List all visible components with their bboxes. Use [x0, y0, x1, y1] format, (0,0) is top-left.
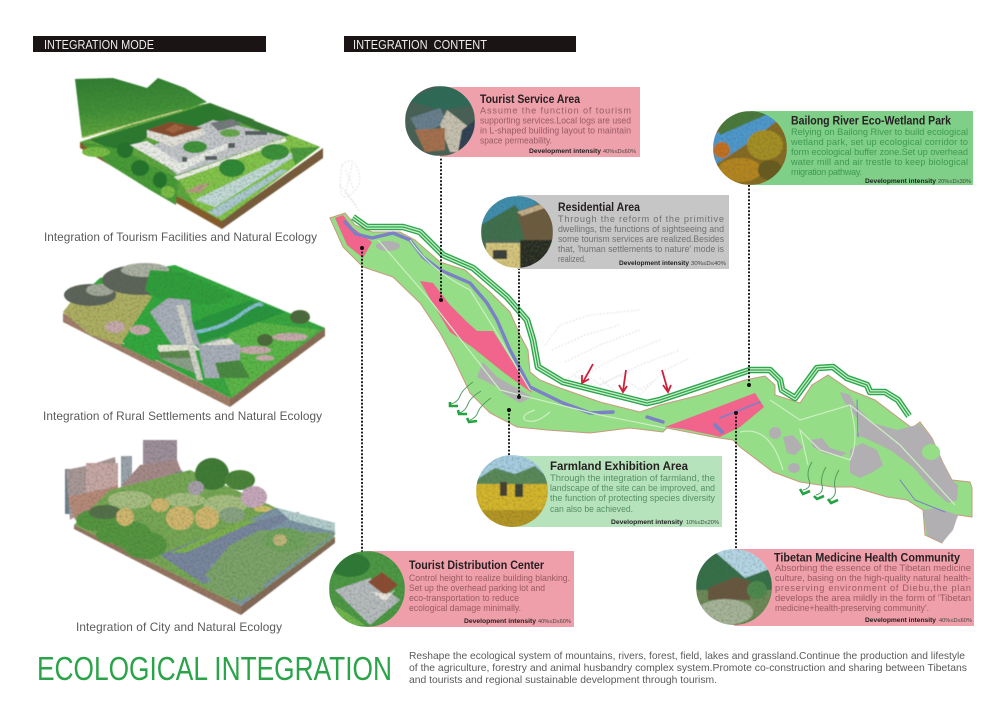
body: farmland: [550, 473, 715, 514]
development intensity: Development intensity: [865, 178, 937, 185]
site map: [330, 161, 972, 543]
body: tibetan medicine community: culture, basing on the high-quality natural health-: [775, 573, 971, 583]
panel: tibetan medicine health community: [696, 549, 974, 627]
body: distribution center: eco-transportation to reduce: [409, 593, 519, 603]
body: tourist service area: Assume the function of tourism: [480, 106, 631, 116]
body: eco-wetland park: migration pathway.: [791, 167, 862, 177]
main title: ECOLOGICAL INTEGRATION: [37, 650, 392, 687]
illustration: city block: [65, 440, 335, 615]
body: residential area: [558, 214, 724, 264]
body: farmland: the function of protecting species diversity: [550, 493, 715, 503]
body: farmland: can also be achieved.: [550, 504, 633, 514]
map: green park area: [330, 213, 972, 543]
body: tourist service area: supporting services.Local logs are used: [480, 116, 631, 126]
panel: bailong river eco-wetland park: [713, 111, 973, 185]
caption: rural settlements: Integration of Rural Settlements and Natural Ecology: [43, 409, 322, 423]
development intensity: Development intensity: [865, 617, 937, 624]
summary text: and tourists and regional sustainable development through tourism.: [409, 675, 717, 686]
body: distribution center: ecological damage minimally.: [409, 603, 521, 613]
body: tibetan medicine community: [775, 563, 971, 613]
heading: integration content: [344, 36, 576, 52]
panel: tourist distribution center: [329, 551, 574, 627]
photo: eco-wetland park: [713, 111, 787, 185]
body: distribution center: Set up the overhead parking lot and: [409, 583, 545, 593]
development intensity: 40%≤D≤60%: [603, 149, 636, 155]
body: farmland: landscape of the site can be improved, and: [550, 483, 715, 493]
development intensity: 30%≤D≤40%: [691, 261, 726, 267]
body: distribution center: [409, 573, 570, 613]
heading: tibetan medicine community: Tibetan Medicine Health Community: [774, 552, 961, 564]
faint context sketch: [340, 161, 690, 396]
icons: red inflow arrows: [582, 364, 671, 392]
photo: farmland: [476, 455, 548, 528]
development intensity: [619, 260, 726, 267]
development intensity: 20%≤D≤30%: [938, 179, 971, 185]
map: green ecological corridor: [353, 217, 909, 416]
body: residential area: dwellings, the functions of sightseeing and: [558, 224, 724, 234]
development intensity: [865, 178, 971, 185]
illustration: tourism facilities block: [75, 78, 323, 229]
body: tibetan medicine community: develops the area mildly in the form of 'Tibetan: [775, 593, 971, 603]
body: eco-wetland park: form ecological buffer zone.Set up overhead: [791, 147, 968, 157]
body: residential area: some tourism services are realized.Besides: [558, 234, 724, 244]
body: tibetan medicine community: medicine+health-preserving community'.: [775, 603, 929, 613]
development intensity: Development intensity: [529, 148, 602, 155]
development intensity: Development intensity: [619, 260, 690, 267]
development intensity: [529, 148, 636, 155]
body: eco-wetland park: [790, 127, 968, 177]
map: pink commercial zones: [335, 215, 764, 437]
heading: residential area: Residential Area: [558, 201, 640, 214]
body: tourist service area: [480, 106, 631, 146]
heading: farmland: Farmland Exhibition Area: [550, 460, 689, 473]
heading: integration content: INTEGRATION CONTENT: [353, 37, 487, 52]
body: tourist service area: in L-shaped building layout to maintain: [480, 126, 631, 136]
body: eco-wetland park: wetland park, set up ecological corridor to: [790, 137, 968, 147]
photo: residential area: [481, 196, 553, 268]
development intensity: Development intensity: [464, 618, 537, 625]
body: tourist service area: space permeability.: [480, 136, 552, 146]
illustration: rural settlements block: [63, 263, 325, 407]
body: distribution center: Control height to realize building blanking.: [409, 573, 570, 583]
photo: distribution center: [329, 551, 405, 627]
heading: integration mode: INTEGRATION MODE: [44, 37, 154, 52]
development intensity: [464, 618, 571, 625]
body: eco-wetland park: water mill and air trestle to keep biological: [790, 157, 968, 167]
panel: tourist service area: [405, 86, 640, 157]
development intensity: 10%≤D≤20%: [686, 520, 719, 526]
map: grey building zones: [376, 241, 958, 543]
development intensity: Development intensity: [611, 519, 684, 526]
heading: distribution center: Tourist Distribution Center: [409, 559, 544, 572]
heading: tourist service area: Tourist Service Area: [480, 93, 580, 106]
summary text: Reshape the ecological system of mountains, rivers, forest, field, lakes and grassland.Continue the production and lifestyle: [409, 651, 965, 662]
summary text: of the agriculture, forestry and animal husbandry complex system.Promote co-construction and sharing between Tibetans: [409, 663, 967, 674]
map: pale paths: [378, 240, 955, 505]
caption: city: Integration of City and Natural Ecology: [76, 620, 282, 634]
development intensity: [865, 617, 972, 624]
photo: tibetan medicine community: [696, 549, 772, 627]
body: residential area: that, 'human settlements to nature' mode is: [558, 244, 724, 254]
panel: farmland exhibition area: [476, 455, 722, 528]
icons: green outflow arrows: [450, 382, 839, 503]
map: green patch in grey zone: [922, 444, 940, 460]
body: tibetan medicine community: preserving environment of Diebu,the plan: [775, 583, 971, 593]
panel: residential area: [481, 195, 729, 269]
leader lines: [362, 155, 749, 552]
body: farmland: Through the integration of farmland, the: [550, 473, 715, 483]
summary text: [409, 651, 967, 686]
development intensity: [611, 519, 719, 526]
leader end dots: [360, 246, 751, 415]
body: residential area: realized.: [558, 254, 586, 264]
development intensity: 40%≤D≤60%: [538, 619, 571, 625]
map: river: [345, 222, 945, 512]
heading: eco-wetland park: Bailong River Eco-Wetland Park: [791, 114, 952, 128]
caption: tourism facilities: Integration of Tourism Facilities and Natural Ecology: [44, 230, 317, 244]
body: eco-wetland park: Relying on Bailong River to build ecological: [791, 127, 968, 137]
body: residential area: Through the reform of the primitive: [558, 214, 724, 224]
heading: integration mode: [33, 36, 266, 52]
photo: tourist service area: [405, 86, 475, 156]
body: tibetan medicine community: Absorbing the essence of the Tibetan medicine: [775, 563, 971, 573]
development intensity: 40%≤D≤60%: [939, 618, 972, 624]
